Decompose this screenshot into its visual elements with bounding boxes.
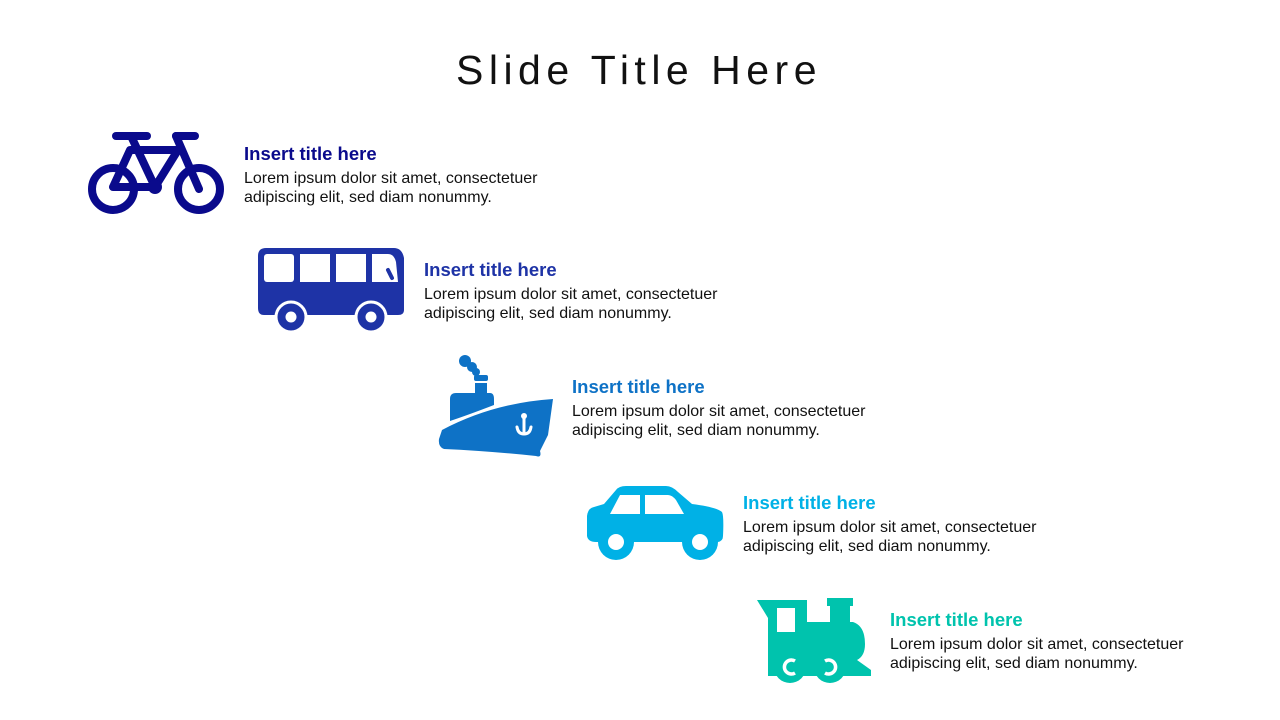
text: item 2: Insert title here	[424, 259, 557, 280]
text: item 1	[244, 143, 538, 206]
text: item 5: adipiscing elit, sed diam nonummy.	[890, 655, 1138, 672]
text: item 2	[424, 259, 718, 322]
text: item 5	[890, 609, 1184, 672]
text: item 4	[743, 492, 1036, 555]
text: item 1: adipiscing elit, sed diam nonummy.	[244, 189, 492, 206]
text: item 4: Lorem ipsum dolor sit amet, consectetuer	[743, 519, 1036, 536]
icon: train	[757, 598, 871, 683]
icon: ship	[438, 355, 553, 456]
text: item 4: adipiscing elit, sed diam nonummy.	[743, 538, 991, 555]
text: item 4: Insert title here	[743, 492, 876, 513]
text: item 1: Insert title here	[244, 143, 377, 164]
icon: bus	[258, 248, 404, 330]
title: Slide Title Here	[456, 47, 822, 93]
text: item 2: adipiscing elit, sed diam nonummy.	[424, 305, 672, 322]
text: item 3: Insert title here	[572, 376, 705, 397]
icon: bicycle	[88, 132, 224, 214]
text: item 2: Lorem ipsum dolor sit amet, consectetuer	[424, 286, 717, 303]
text: item 1: Lorem ipsum dolor sit amet, consectetuer	[244, 170, 537, 187]
text: item 5: Lorem ipsum dolor sit amet, consectetuer	[890, 636, 1183, 653]
text: item 3	[572, 376, 866, 439]
text: item 3: adipiscing elit, sed diam nonummy.	[572, 422, 820, 439]
text: item 3: Lorem ipsum dolor sit amet, consectetuer	[572, 403, 865, 420]
icon: car	[587, 486, 724, 560]
text: item 5: Insert title here	[890, 609, 1023, 630]
